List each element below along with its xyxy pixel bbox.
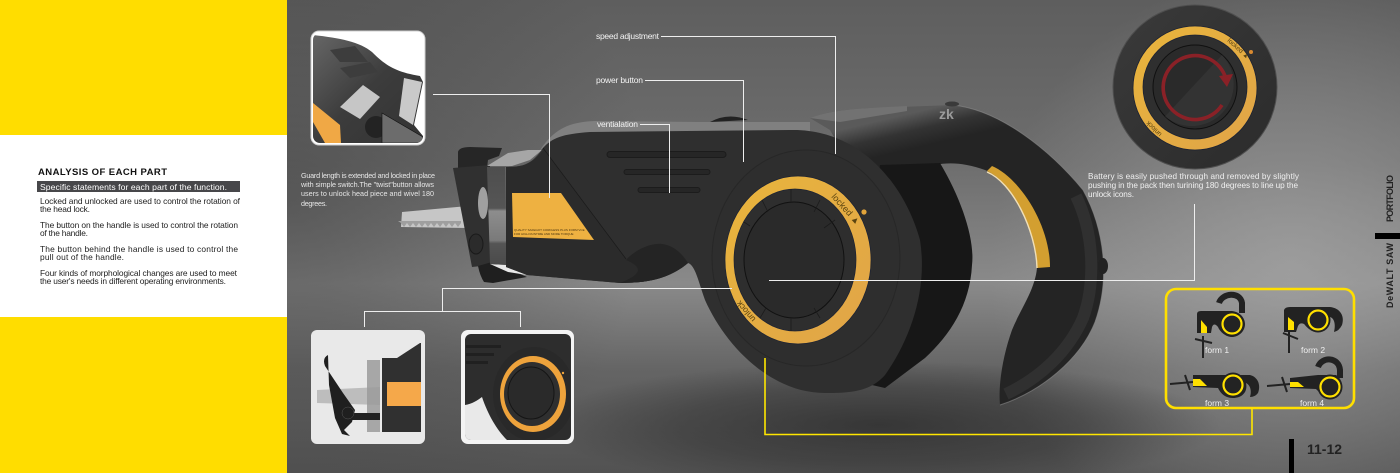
form 3 icon: form 3	[1205, 398, 1229, 408]
text block: part statements: the head lock.	[40, 204, 90, 214]
form 1 icon	[1195, 295, 1245, 358]
text block: part statements: the user's needs in different operating environments.	[40, 276, 226, 286]
handle rim highlight	[953, 105, 1104, 405]
text block: battery: unlock icons.	[1088, 190, 1134, 199]
form 3 icon	[1170, 372, 1259, 408]
inset: side view	[311, 330, 425, 444]
rotation arrow	[1163, 56, 1233, 120]
status dot	[861, 209, 867, 215]
top button	[710, 116, 748, 122]
background: grey studio backdrop	[287, 0, 1400, 473]
side title	[1375, 175, 1400, 308]
disc	[712, 150, 900, 366]
page number: 11-12	[1307, 441, 1342, 457]
inset: head closeup	[311, 31, 425, 145]
panel: yellow sidebar	[0, 0, 287, 473]
dial dot	[1249, 50, 1253, 54]
guard shoe	[453, 147, 527, 283]
callout: ventilation: ventialation	[597, 119, 638, 129]
text block: guard: users to unlock head piece and wivel 180	[301, 189, 434, 198]
panel: four forms	[1166, 289, 1354, 408]
dial closeup	[1113, 5, 1277, 169]
handle top strip	[810, 106, 907, 122]
form 2 icon: form 2	[1301, 345, 1325, 355]
text block: guard	[300, 171, 435, 208]
handle button	[1098, 258, 1108, 274]
heading: analysis of each part: ANALYSIS OF EACH PART	[38, 167, 167, 178]
ventilation slots	[607, 152, 726, 192]
label plate	[512, 193, 594, 240]
yellow connector to forms	[765, 358, 1252, 434]
callout: speed adjustment: speed adjustment	[596, 31, 660, 41]
text block: part statements	[40, 196, 241, 286]
ring label: unlock: unlock	[734, 298, 758, 324]
inset: ring closeup	[461, 330, 575, 444]
label plate: FOR HIGH RUNTIME AND MORE TORQUE	[514, 232, 574, 236]
body lower shade and crease	[506, 148, 688, 283]
dial label: locked: locked ▲	[1226, 37, 1250, 61]
text block: part statements: Locked and unlocked are used to control the rotation of	[40, 196, 241, 206]
saw product render	[398, 102, 1108, 405]
text block: guard: Guard length is extended and locked in place	[301, 171, 435, 180]
text block: guard: with simple switch.The "twist"button allows	[300, 180, 434, 189]
subheading bar: Specific statements for each part of the function.	[40, 182, 227, 192]
text block: battery: pushing in the pack then turining 180 degrees to line up the	[1088, 181, 1298, 190]
side title: DeWALT SAW	[1385, 242, 1395, 308]
callout lines	[364, 36, 1194, 327]
orange ring	[725, 176, 871, 344]
text block: part statements: The button behind the handle is used to control the	[40, 244, 238, 254]
form 2 icon	[1283, 307, 1343, 355]
label plate: QUALITY SAFEGOT CORDLESS PLUS FORM VCE	[514, 228, 585, 232]
maker mark: zk	[939, 106, 954, 122]
clear twist housing	[487, 150, 542, 265]
form 4 icon	[1267, 359, 1342, 408]
top handle stud	[945, 102, 959, 106]
handle orange trim	[987, 166, 1050, 268]
dial label: unlock: unlock	[1145, 119, 1163, 138]
handle	[810, 105, 1104, 405]
form 4 icon: form 4	[1300, 398, 1324, 408]
text block: guard: degrees.	[301, 199, 327, 208]
main body	[506, 130, 922, 393]
page number	[1289, 439, 1342, 473]
form 1 icon: form 1	[1205, 345, 1229, 355]
text block: part statements: Four kinds of morphological changes are used to meet	[40, 268, 238, 278]
top translucent shell highlight	[540, 121, 810, 150]
text block: part statements: of the handle.	[40, 228, 88, 238]
saw blade	[398, 206, 468, 228]
side title: PORTFOLIO	[1385, 175, 1395, 222]
text block: part statements: pull out of the handle.	[40, 252, 124, 262]
ring label: locked: locked ▲	[830, 192, 862, 227]
text block: battery	[1088, 172, 1300, 199]
callout: power button: power button	[596, 75, 643, 85]
text block: battery: Battery is easily pushed through and removed by slightly	[1088, 172, 1300, 181]
rear dark body	[850, 163, 972, 388]
text block: part statements: The button on the handle is used to control the rotation	[40, 220, 238, 230]
